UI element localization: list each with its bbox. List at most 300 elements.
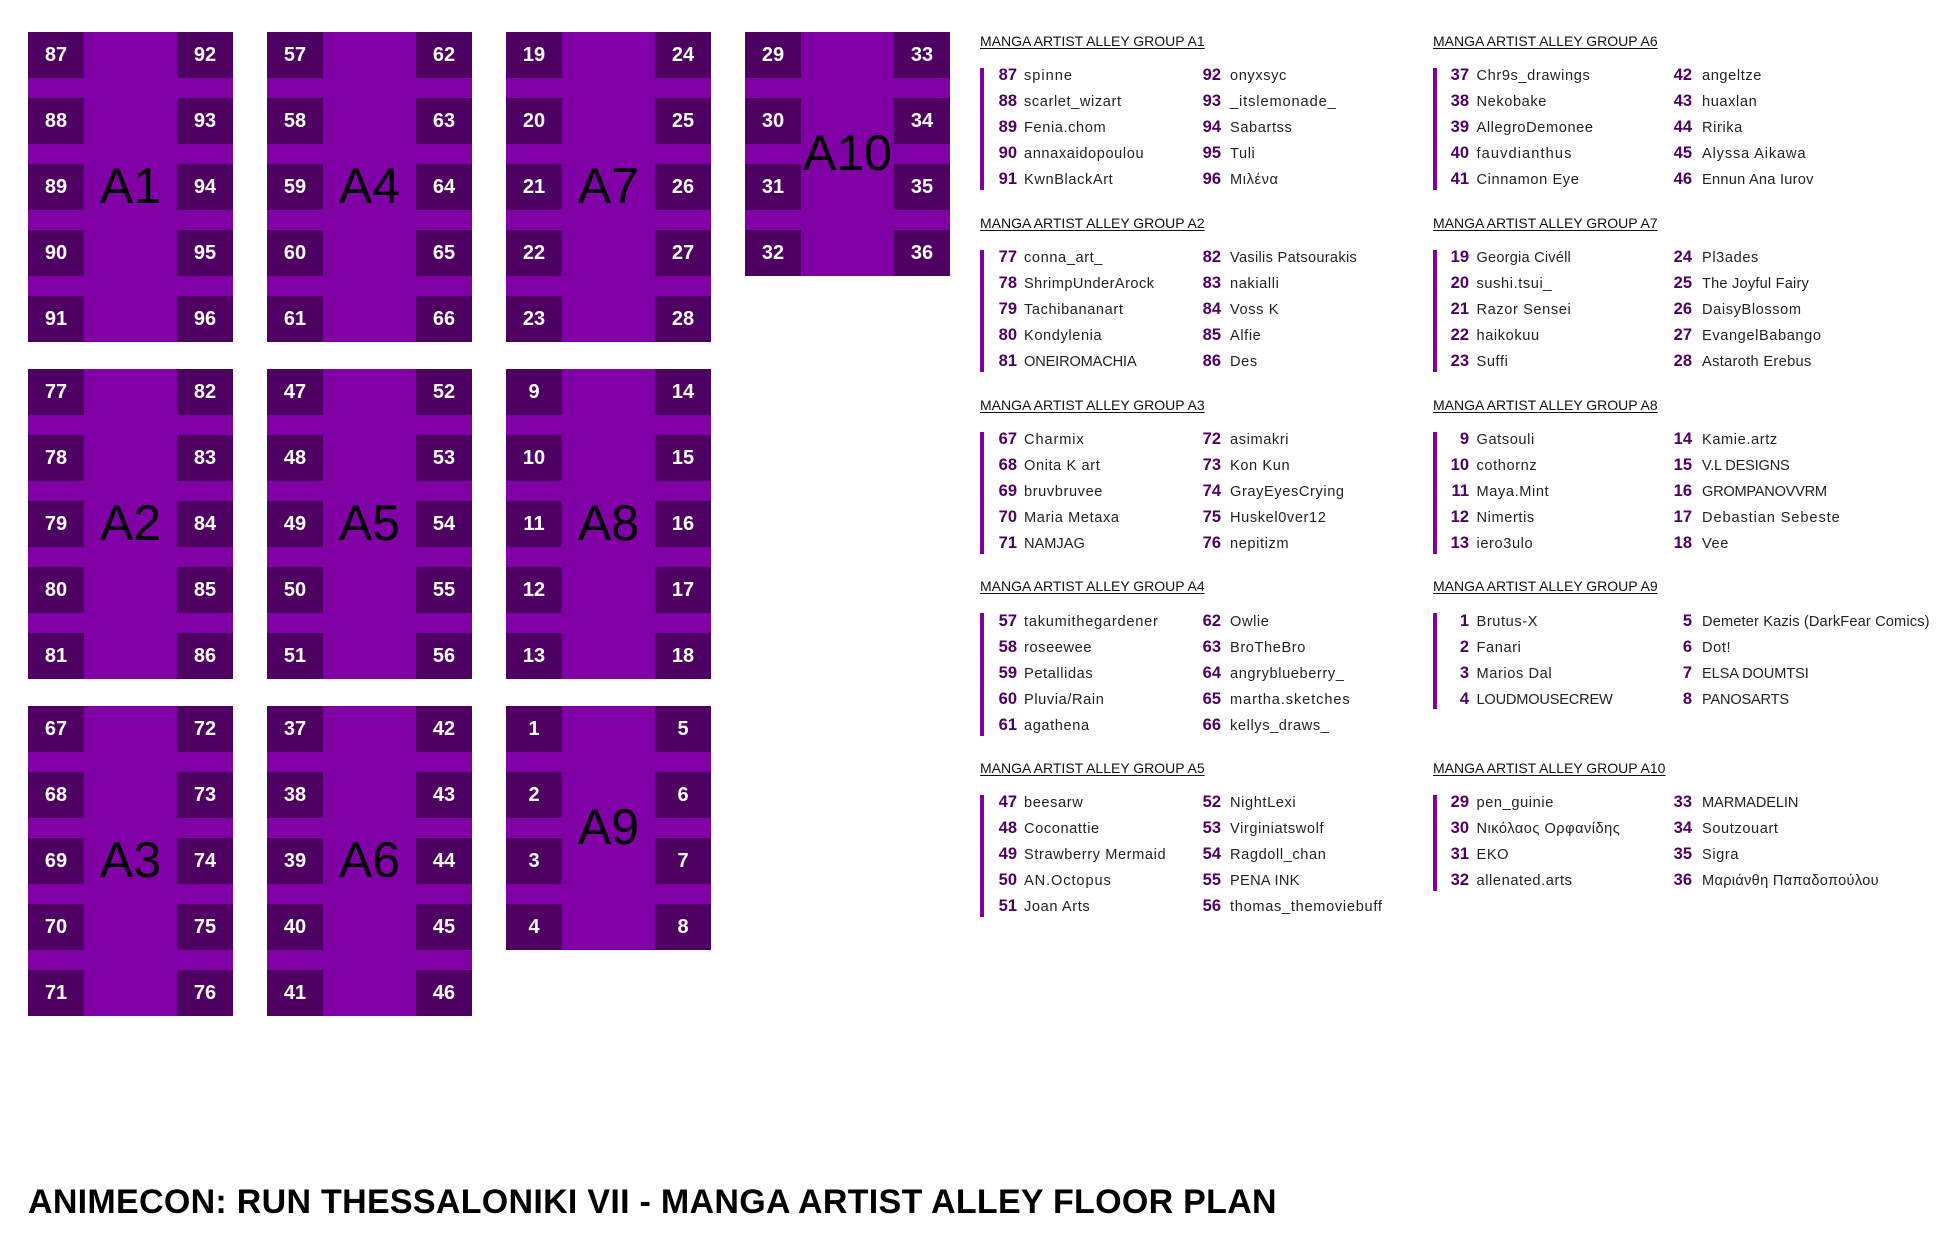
seat 8 (655, 904, 711, 950)
entry 34 (1656, 816, 1886, 840)
entry 57: 57 (999, 612, 1017, 630)
entry 24 (1656, 245, 1886, 269)
seat 39: 39 (284, 850, 306, 872)
entry 69: 69 (999, 482, 1017, 500)
heading A5: MANGA ARTIST ALLEY GROUP A5 (980, 760, 1205, 776)
entry 1: 1 (1460, 612, 1469, 630)
seat 21 (506, 164, 562, 210)
seat 17: 17 (672, 579, 694, 601)
entry 5 (1656, 609, 1886, 633)
entry 81: 81 (999, 352, 1017, 370)
panel: legend group A3 (980, 397, 1345, 554)
entry 4: 4 (1460, 690, 1469, 708)
entry 58 (999, 638, 1092, 656)
accent bar (980, 432, 984, 554)
seat 12 (506, 567, 562, 613)
entry 56: thomas_themoviebuff (1230, 899, 1383, 915)
seat 74 (177, 838, 233, 884)
seat 91 (28, 296, 84, 342)
accent bar (1433, 613, 1437, 709)
entry 47 (980, 790, 1210, 814)
entry 75: Huskel0ver12 (1230, 510, 1326, 526)
entry 57: takumithegardener (1024, 614, 1159, 630)
entry 42: 42 (1674, 66, 1692, 84)
seat 7 (655, 838, 711, 884)
seat 55 (416, 567, 472, 613)
entry 21: Razor Sensei (1476, 302, 1571, 318)
entry 66 (1184, 713, 1414, 737)
entry 35: Sigra (1702, 847, 1739, 863)
entry 11 (1433, 479, 1663, 503)
entry 94: 94 (1203, 118, 1221, 136)
seat 63 (416, 98, 472, 144)
seat 94 (177, 164, 233, 210)
entry 10: 10 (1451, 456, 1469, 474)
entry 34: Soutzouart (1702, 821, 1779, 837)
entry 78: ShrimpUnderArock (1024, 276, 1154, 292)
entry 28: 28 (1674, 352, 1692, 370)
seat 92 (177, 32, 233, 78)
seat 95 (177, 230, 233, 276)
seat 46 (416, 970, 472, 1016)
entry 28: Astaroth Erebus (1702, 354, 1812, 370)
entry 80 (999, 326, 1102, 344)
entry 16: 16 (1674, 482, 1692, 500)
entry 18: Vee (1702, 536, 1729, 552)
entry 77: 77 (999, 248, 1017, 266)
entry 69 (999, 482, 1103, 500)
seat 18 (655, 633, 711, 679)
seat 14 (655, 369, 711, 415)
entry 54: 54 (1203, 845, 1221, 863)
seat 88 (28, 98, 84, 144)
entry 90: annaxaidopoulou (1024, 146, 1144, 162)
seat 18: 18 (672, 645, 694, 667)
entry 75 (1203, 508, 1326, 526)
entry 53: Virginiatswolf (1230, 821, 1324, 837)
seat 86: 86 (194, 645, 216, 667)
seat 87 (28, 32, 84, 78)
seat 80: 80 (45, 579, 67, 601)
seat 42: 42 (433, 718, 455, 740)
entry 41: Cinnamon Eye (1476, 172, 1579, 188)
entry 95: 95 (1203, 144, 1221, 162)
entry 73: Kon Kun (1230, 458, 1290, 474)
seat 21: 21 (523, 176, 545, 198)
seat 13 (506, 633, 562, 679)
heading A9: MANGA ARTIST ALLEY GROUP A9 (1433, 578, 1658, 594)
seat 43 (416, 772, 472, 818)
entry 50: 50 (999, 871, 1017, 889)
label A4: A4 (339, 158, 400, 214)
entry 49: Strawberry Mermaid (1024, 847, 1166, 863)
seat 78 (28, 435, 84, 481)
entry 20: 20 (1451, 274, 1469, 292)
entry 48: Coconattie (1024, 821, 1100, 837)
seat 1 (506, 706, 562, 752)
entry 36: Μαριάνθη Παπαδοπούλου (1702, 873, 1879, 889)
seat 75 (177, 904, 233, 950)
seat 38 (267, 772, 323, 818)
seat 53 (416, 435, 472, 481)
seat 66 (416, 296, 472, 342)
entry 69: bruvbruvee (1024, 484, 1103, 500)
entry 84: Voss K (1230, 302, 1279, 318)
seat 5: 5 (677, 718, 689, 740)
panel: block A3 (28, 706, 233, 1016)
entry 76 (1203, 534, 1289, 552)
seat 89 (28, 164, 84, 210)
entry 12: 12 (1451, 508, 1469, 526)
entry 8: 8 (1683, 690, 1692, 708)
seat 54: 54 (433, 513, 455, 535)
entry 35 (1656, 842, 1886, 866)
entry 74: GrayEyesCrying (1230, 484, 1345, 500)
seat 57 (267, 32, 323, 78)
seat 83: 83 (194, 447, 216, 469)
entry 60: 60 (999, 690, 1017, 708)
entry 27: EvangelBabango (1702, 328, 1822, 344)
label A3: A3 (100, 832, 161, 888)
entry 63: 63 (1203, 638, 1221, 656)
heading A1: MANGA ARTIST ALLEY GROUP A1 (980, 33, 1205, 49)
seat 34: 34 (911, 110, 933, 132)
entry 89: 89 (999, 118, 1017, 136)
seat 70 (28, 904, 84, 950)
panel: block A7 (506, 32, 711, 342)
entry 72: asimakri (1230, 432, 1289, 448)
entry 50 (980, 868, 1210, 892)
entry 72: 72 (1203, 430, 1221, 448)
seat 31: 31 (762, 176, 784, 198)
entry 59: 59 (999, 664, 1017, 682)
entry 33: 33 (1674, 793, 1692, 811)
seat 12: 12 (523, 579, 545, 601)
entry 17 (1656, 505, 1886, 529)
entry 96 (1203, 170, 1279, 188)
entry 30 (1433, 816, 1663, 840)
entry 96: 96 (1203, 170, 1221, 188)
entry 32 (1433, 868, 1663, 892)
seat 52: 52 (433, 381, 455, 403)
accent bar (980, 250, 984, 372)
entry 88: scarlet_wizart (1024, 94, 1122, 110)
title: ANIMECON: RUN THESSALONIKI VII - MANGA ARTIST ALLEY FLOOR PLAN (28, 1183, 1277, 1221)
entry 49: 49 (999, 845, 1017, 863)
entry 89 (999, 118, 1106, 136)
entry 12: Nimertis (1476, 510, 1535, 526)
panel: block A2 (28, 369, 233, 679)
seat 19 (506, 32, 562, 78)
entry 45: Alyssa Aikawa (1702, 146, 1806, 162)
entry 39: AllegroDemonee (1476, 120, 1594, 136)
heading A3: MANGA ARTIST ALLEY GROUP A3 (980, 397, 1205, 413)
seat 81: 81 (45, 645, 67, 667)
seat 47 (267, 369, 323, 415)
panel: legend group A8 (1433, 394, 1933, 564)
entry 35: 35 (1674, 845, 1692, 863)
entry 22: 22 (1451, 326, 1469, 344)
entry 28 (1656, 349, 1886, 373)
entry 27 (1656, 323, 1886, 347)
seat 27: 27 (672, 242, 694, 264)
seat 7: 7 (677, 850, 689, 872)
panel: legend group A9 (1433, 575, 1933, 745)
seat 56 (416, 633, 472, 679)
entry 70: Maria Metaxa (1024, 510, 1120, 526)
accent bar (1433, 432, 1437, 554)
accent bar (1433, 250, 1437, 372)
entry 51: 51 (999, 897, 1017, 915)
heading A7: MANGA ARTIST ALLEY GROUP A7 (1433, 215, 1658, 231)
seat 16: 16 (672, 513, 694, 535)
seat 67: 67 (45, 718, 67, 740)
entry 46: Ennun Ana Iurov (1702, 172, 1814, 188)
entry 61: agathena (1024, 718, 1090, 734)
seat 73 (177, 772, 233, 818)
seat 77 (28, 369, 84, 415)
seat 93: 93 (194, 110, 216, 132)
entry 62 (1203, 612, 1270, 630)
entry 14 (1656, 427, 1886, 451)
entry 14: 14 (1674, 430, 1692, 448)
entry 74: 74 (1203, 482, 1221, 500)
seat 29: 29 (762, 44, 784, 66)
entry 20: sushi.tsui_ (1476, 276, 1552, 292)
entry 60 (999, 690, 1104, 708)
seat 1: 1 (528, 718, 540, 740)
seat 10: 10 (523, 447, 545, 469)
entry 41 (1433, 167, 1663, 191)
seat 85: 85 (194, 579, 216, 601)
entry 7: ELSA DOUMTSI (1702, 666, 1809, 682)
entry 11: 11 (1452, 482, 1469, 500)
entry 5: Demeter Kazis (DarkFear Comics) (1702, 614, 1930, 630)
entry 64: angryblueberry_ (1230, 666, 1344, 682)
entry 6 (1656, 635, 1886, 659)
entry 67 (999, 430, 1085, 448)
seat 46: 46 (433, 982, 455, 1004)
entry 73 (1203, 456, 1290, 474)
heading A4: MANGA ARTIST ALLEY GROUP A4 (980, 578, 1205, 594)
accent bar (1433, 795, 1437, 891)
seat 56: 56 (433, 645, 455, 667)
entry 47: beesarw (1024, 795, 1083, 811)
seat 48: 48 (284, 447, 306, 469)
entry 73: 73 (1203, 456, 1221, 474)
seat 26: 26 (672, 176, 694, 198)
seat 25: 25 (672, 110, 694, 132)
entry 45 (1656, 141, 1886, 165)
entry 36 (1656, 868, 1886, 892)
entry 16: GROMPANOVVRM (1702, 484, 1827, 500)
seat 60: 60 (284, 242, 306, 264)
entry 21 (1433, 297, 1663, 321)
panel: legend group A4 (980, 578, 1351, 736)
seat 51 (267, 633, 323, 679)
entry 48 (980, 816, 1210, 840)
entry 91 (999, 170, 1113, 188)
seat 68: 68 (45, 784, 67, 806)
seat 75: 75 (194, 916, 216, 938)
entry 2 (1433, 635, 1663, 659)
entry 19: Georgia Civéll (1476, 250, 1571, 266)
panel: legend group A2 (980, 215, 1357, 372)
entry 3: 3 (1460, 664, 1469, 682)
entry 13: iero3ulo (1476, 536, 1533, 552)
seat 11 (506, 501, 562, 547)
seat 36: 36 (911, 242, 933, 264)
seat 4: 4 (528, 916, 540, 938)
seat 84 (177, 501, 233, 547)
seat 96 (177, 296, 233, 342)
seat 59 (267, 164, 323, 210)
seat 5 (655, 706, 711, 752)
entry 25 (1656, 271, 1886, 295)
entry 85: Alfie (1230, 328, 1261, 344)
entry 44: Ririka (1702, 120, 1743, 136)
entry 51 (980, 894, 1210, 918)
seat 44 (416, 838, 472, 884)
seat 22 (506, 230, 562, 276)
entry 10: cothornz (1476, 458, 1537, 474)
seat 24: 24 (672, 44, 694, 66)
seat 51: 51 (284, 645, 306, 667)
seat 3: 3 (528, 850, 540, 872)
seat 61 (267, 296, 323, 342)
entry 42: angeltze (1702, 68, 1762, 84)
seat 2 (506, 772, 562, 818)
entry 18: 18 (1674, 534, 1692, 552)
entry 30: Νικόλαος Ορφανίδης (1476, 821, 1620, 837)
entry 87: spinne (1024, 68, 1073, 84)
entry 19 (1433, 245, 1663, 269)
seat 83 (177, 435, 233, 481)
seat 58: 58 (284, 110, 306, 132)
entry 5: 5 (1683, 612, 1692, 630)
entry 13 (1433, 531, 1663, 555)
entry 77 (999, 248, 1103, 266)
seat 72: 72 (194, 718, 216, 740)
entry 84: 84 (1203, 300, 1221, 318)
panel: block A8 (506, 369, 711, 679)
entry 85 (1203, 326, 1261, 344)
entry 79: Tachibananart (1024, 302, 1123, 318)
seat 28 (655, 296, 711, 342)
seat 41 (267, 970, 323, 1016)
entry 26 (1656, 297, 1886, 321)
entry 38 (1433, 89, 1663, 113)
entry 91: 91 (999, 170, 1017, 188)
entry 67: Charmix (1024, 432, 1085, 448)
entry 1 (1433, 609, 1663, 633)
seat 67 (28, 706, 84, 752)
entry 64: 64 (1203, 664, 1221, 682)
entry 88: 88 (999, 92, 1017, 110)
entry 39: 39 (1451, 118, 1469, 136)
entry 94 (1203, 118, 1292, 136)
entry 10 (1433, 453, 1663, 477)
seat 35: 35 (911, 176, 933, 198)
entry 62: 62 (1203, 612, 1221, 630)
entry 43 (1656, 89, 1886, 113)
entry 63: BroTheBro (1230, 640, 1306, 656)
seat 64: 64 (433, 176, 455, 198)
label A6: A6 (339, 832, 400, 888)
entry 15 (1656, 453, 1886, 477)
entry 29: 29 (1451, 793, 1469, 811)
seat 64 (416, 164, 472, 210)
entry 71: NAMJAG (1024, 536, 1085, 552)
entry 51: Joan Arts (1024, 899, 1090, 915)
seat 61: 61 (284, 308, 306, 330)
seat 6: 6 (677, 784, 689, 806)
entry 8 (1656, 687, 1886, 711)
seat 45 (416, 904, 472, 950)
panel: legend group A10 (1433, 757, 1933, 927)
entry 40 (1433, 141, 1663, 165)
entry 25: The Joyful Fairy (1702, 276, 1809, 292)
entry 61: 61 (999, 716, 1017, 734)
entry 19: 19 (1451, 248, 1469, 266)
entry 1: Brutus-X (1476, 614, 1538, 630)
seat 80 (28, 567, 84, 613)
entry 81: ONEIROMACHIA (1024, 354, 1137, 370)
entry 32: 32 (1451, 871, 1469, 889)
seat 6 (655, 772, 711, 818)
seat 31 (745, 164, 801, 210)
seat 58 (267, 98, 323, 144)
seat 47: 47 (284, 381, 306, 403)
seat 43: 43 (433, 784, 455, 806)
accent bar (980, 795, 984, 917)
entry 12 (1433, 505, 1663, 529)
accent bar (980, 68, 984, 190)
seat 13: 13 (523, 645, 545, 667)
entry 63 (1184, 635, 1414, 659)
entry 46 (1656, 167, 1886, 191)
entry 83: 83 (1203, 274, 1221, 292)
accent bar (980, 613, 984, 736)
entry 43: huaxlan (1702, 94, 1757, 110)
seat 63: 63 (433, 110, 455, 132)
seat 91: 91 (45, 308, 67, 330)
entry 42 (1656, 63, 1886, 87)
entry 40: 40 (1451, 144, 1469, 162)
label A8: A8 (578, 495, 639, 551)
seat 68 (28, 772, 84, 818)
seat 65 (416, 230, 472, 276)
entry 52: 52 (1203, 793, 1221, 811)
panel: legend group A5 (980, 757, 1450, 927)
seat 26 (655, 164, 711, 210)
seat 39 (267, 838, 323, 884)
accent bar (1433, 68, 1437, 190)
seat 49 (267, 501, 323, 547)
seat 55: 55 (433, 579, 455, 601)
entry 82: Vasilis Patsourakis (1230, 250, 1357, 266)
entry 41: 41 (1451, 170, 1469, 188)
seat 38: 38 (284, 784, 306, 806)
seat 50 (267, 567, 323, 613)
label A10: A10 (803, 125, 892, 181)
entry 86 (1203, 352, 1258, 370)
seat 37: 37 (284, 718, 306, 740)
seat 79: 79 (45, 513, 67, 535)
entry 61 (999, 716, 1090, 734)
entry 52: NightLexi (1230, 795, 1296, 811)
entry 38: 38 (1451, 92, 1469, 110)
